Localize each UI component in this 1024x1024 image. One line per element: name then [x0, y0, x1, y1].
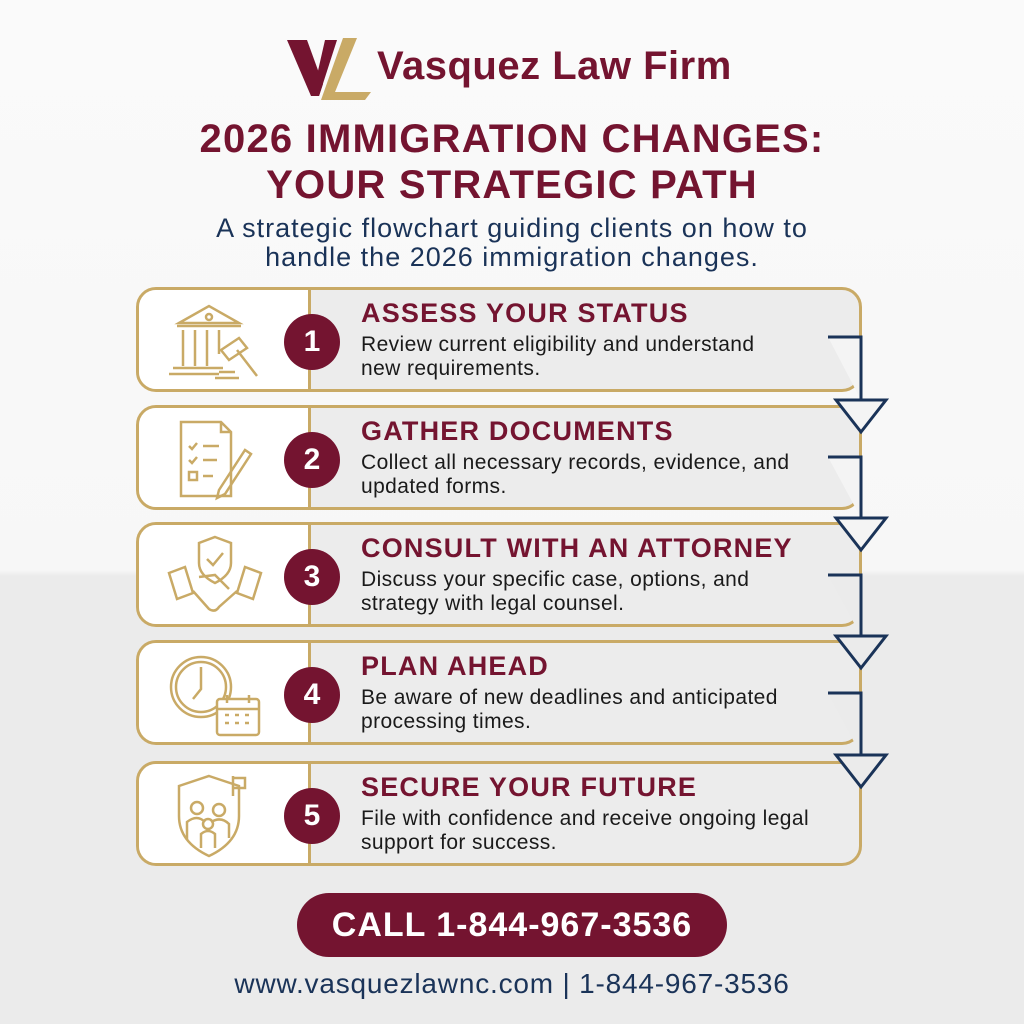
- brand name: Vasquez Law Firm: [377, 44, 732, 88]
- description: support for success.: [361, 831, 557, 854]
- description: [361, 451, 789, 498]
- heading: PLAN AHEAD: [361, 651, 549, 681]
- description: [361, 333, 754, 380]
- step number: [284, 549, 340, 605]
- subtitle: handle the 2026 immigration changes.: [265, 242, 759, 272]
- description: Discuss your specific case, options, and: [361, 568, 749, 591]
- description: processing times.: [361, 710, 531, 733]
- title: 2026 IMMIGRATION CHANGES:: [200, 117, 824, 161]
- icon: handshake shield: [139, 525, 311, 624]
- step number: 1: [304, 325, 320, 358]
- icon: courthouse gavel: [139, 290, 311, 389]
- panel: step 4: [136, 640, 862, 745]
- logo: [287, 38, 732, 100]
- icon: clock calendar: [139, 643, 311, 742]
- step number: [284, 314, 340, 370]
- description: Be aware of new deadlines and anticipated: [361, 686, 778, 709]
- title: [200, 117, 824, 207]
- panel: step 2: [136, 405, 862, 510]
- step number: 5: [304, 799, 320, 832]
- panel: step 1: [136, 287, 862, 392]
- description: new requirements.: [361, 357, 541, 380]
- description: [361, 686, 778, 733]
- heading: SECURE YOUR FUTURE: [361, 772, 697, 802]
- description: [361, 807, 809, 854]
- CTA button: CALL 1-844-967-3536: [332, 906, 692, 944]
- heading: CONSULT WITH AN ATTORNEY: [361, 533, 793, 563]
- step number: [284, 667, 340, 723]
- step number: [284, 788, 340, 844]
- step number: 2: [304, 443, 320, 476]
- description: [361, 568, 749, 615]
- icon: VL monogram: [287, 38, 371, 100]
- description: File with confidence and receive ongoing legal: [361, 807, 809, 830]
- title: YOUR STRATEGIC PATH: [266, 163, 758, 207]
- description: Collect all necessary records, evidence, and: [361, 451, 789, 474]
- panel: step 3: [136, 522, 862, 627]
- subtitle: A strategic flowchart guiding clients on how to: [216, 213, 808, 243]
- subtitle: [216, 213, 808, 272]
- description: strategy with legal counsel.: [361, 592, 624, 615]
- description: updated forms.: [361, 475, 507, 498]
- step number: [284, 432, 340, 488]
- CTA button: [297, 893, 727, 957]
- step number: 4: [304, 678, 320, 711]
- heading: GATHER DOCUMENTS: [361, 416, 674, 446]
- description: Review current eligibility and understand: [361, 333, 754, 356]
- panel: step 5: [136, 761, 862, 866]
- footer contact: www.vasquezlawnc.com | 1-844-967-3536: [234, 968, 790, 999]
- icon: family shield: [139, 764, 311, 863]
- icon: checklist: [139, 408, 311, 507]
- heading: ASSESS YOUR STATUS: [361, 298, 689, 328]
- step number: 3: [304, 560, 320, 593]
